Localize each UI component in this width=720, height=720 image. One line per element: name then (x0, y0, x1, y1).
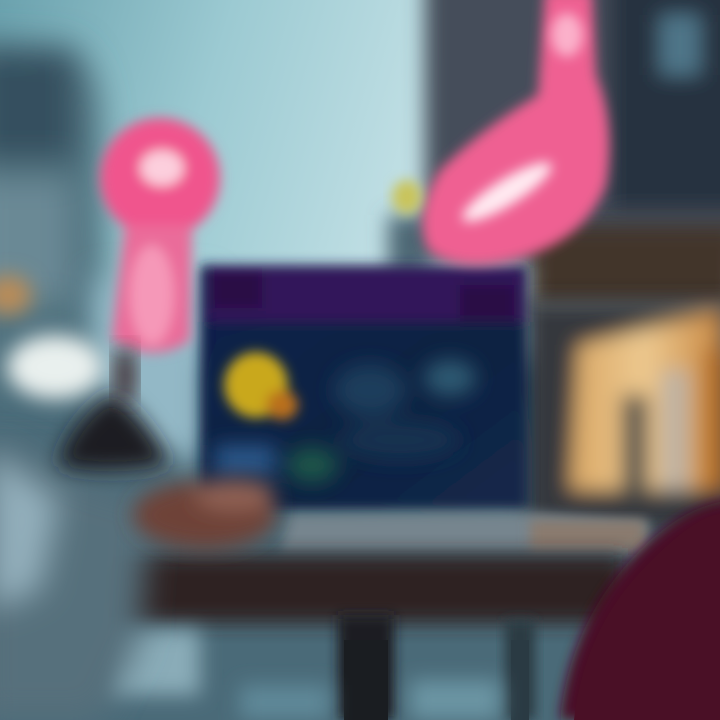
laptop (200, 265, 650, 552)
building: right dark facade (388, 0, 720, 275)
sign: pink keyhole balloon (100, 118, 220, 352)
person torso (0, 444, 150, 720)
table leg right (505, 620, 535, 720)
bubble yellow tip (392, 180, 422, 214)
person: seated figure at left (0, 350, 277, 720)
person arm and hand (133, 479, 277, 549)
sign: large pink speech bubble (392, 0, 609, 265)
shop awning (530, 225, 720, 310)
table leg left (338, 615, 394, 720)
laptop keyboard base (280, 512, 650, 552)
foreground: maroon shoulder (560, 500, 720, 720)
mid-left haze behind laptop (95, 280, 210, 460)
shoulder edge fill (574, 514, 720, 720)
building: left tower (0, 40, 108, 400)
screen yellow icon (224, 352, 298, 420)
left lamp glow (0, 275, 103, 399)
table (95, 555, 625, 720)
bubble highlight (456, 13, 583, 231)
floor reflections (105, 630, 500, 720)
street base (0, 420, 720, 720)
person hair (58, 392, 170, 472)
storefront: warm lit shop (525, 225, 720, 530)
table leg right base (511, 640, 529, 720)
laptop screen (200, 265, 528, 510)
street lower background (0, 360, 720, 720)
screen chart marks (215, 360, 476, 483)
table leg left base (344, 640, 388, 720)
shop window glow (525, 300, 720, 530)
